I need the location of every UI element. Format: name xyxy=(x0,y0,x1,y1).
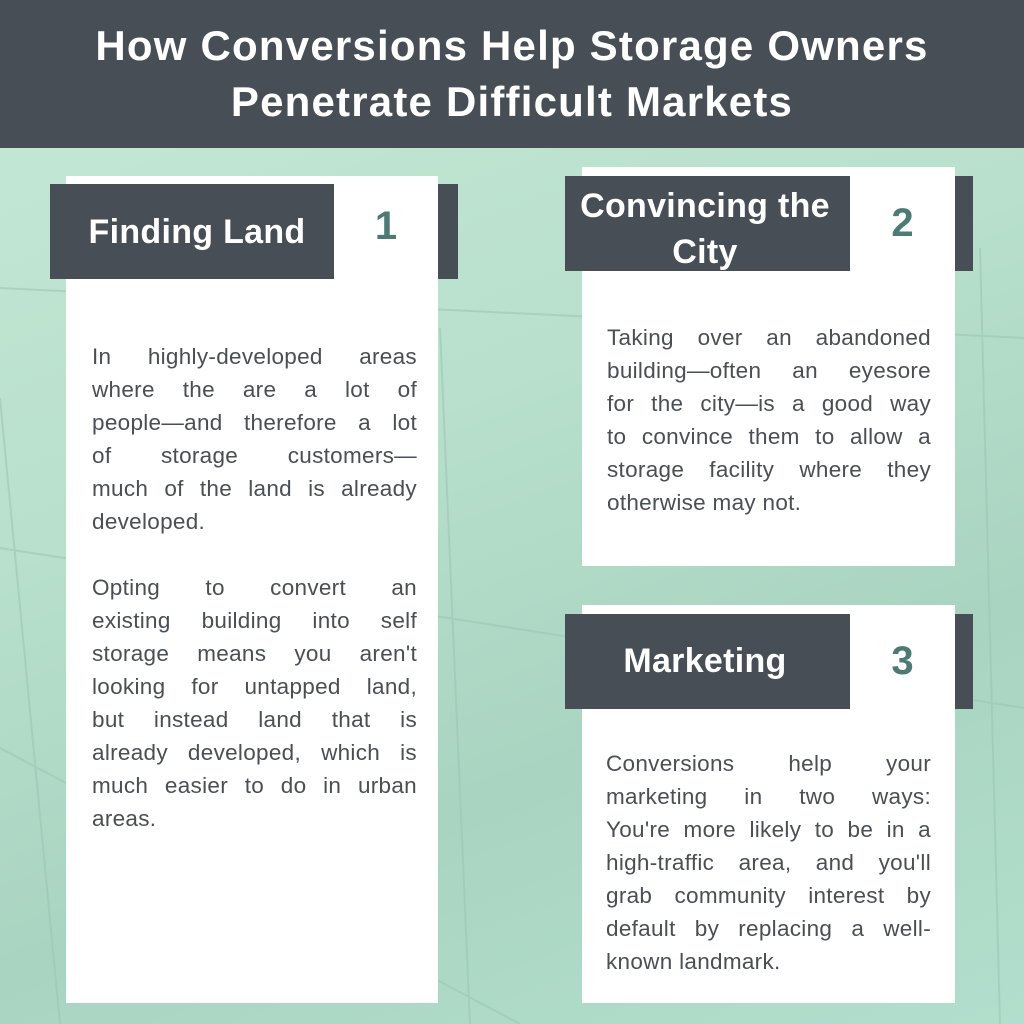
text block: much of the land is already xyxy=(92,476,417,501)
title: Penetrate Difficult Markets xyxy=(231,78,793,125)
text block: where the are a lot of xyxy=(92,377,417,402)
text block: known landmark. xyxy=(606,949,781,974)
text block: for the city—is a good way xyxy=(607,391,931,416)
heading: Finding Land xyxy=(88,213,306,251)
number: 3 xyxy=(891,639,914,683)
number: 1 xyxy=(375,204,397,248)
text block: default by replacing a well- xyxy=(606,916,931,941)
text block: Opting to convert an xyxy=(92,575,417,600)
text block: but instead land that is xyxy=(92,707,417,732)
number: 2 xyxy=(891,201,914,245)
text block: of storage customers— xyxy=(92,443,417,468)
heading: Convincing the City xyxy=(580,187,830,271)
text block: storage facility where they xyxy=(607,457,931,482)
text block: areas. xyxy=(92,806,156,831)
text block: You're more likely to be in a xyxy=(606,817,931,842)
text block: looking for untapped land, xyxy=(92,674,417,699)
text block: marketing in two ways: xyxy=(606,784,931,809)
text block: otherwise may not. xyxy=(607,490,801,515)
text block: high-traffic area, and you'll xyxy=(606,850,931,875)
title: How Conversions Help Storage Owners xyxy=(95,22,929,69)
text block xyxy=(92,344,417,831)
text block: building—often an eyesore xyxy=(607,358,931,383)
text block xyxy=(606,751,931,974)
text block: storage means you aren't xyxy=(92,641,417,666)
title xyxy=(0,0,1024,148)
heading: Marketing xyxy=(623,642,787,680)
text block: In highly-developed areas xyxy=(92,344,417,369)
text block: people—and therefore a lot xyxy=(92,410,417,435)
text block: Taking over an abandoned xyxy=(607,325,931,350)
panel: finding land xyxy=(50,176,458,1003)
text block: already developed, which is xyxy=(92,740,417,765)
text block: to convince them to allow a xyxy=(607,424,931,449)
text block xyxy=(607,325,931,515)
text block: developed. xyxy=(92,509,205,534)
text block: grab community interest by xyxy=(606,883,931,908)
text block: Conversions help your xyxy=(606,751,931,776)
panel: convincing the city xyxy=(565,167,973,566)
panel: marketing xyxy=(565,605,973,1003)
text block: much easier to do in urban xyxy=(92,773,417,798)
text block: existing building into self xyxy=(92,608,417,633)
